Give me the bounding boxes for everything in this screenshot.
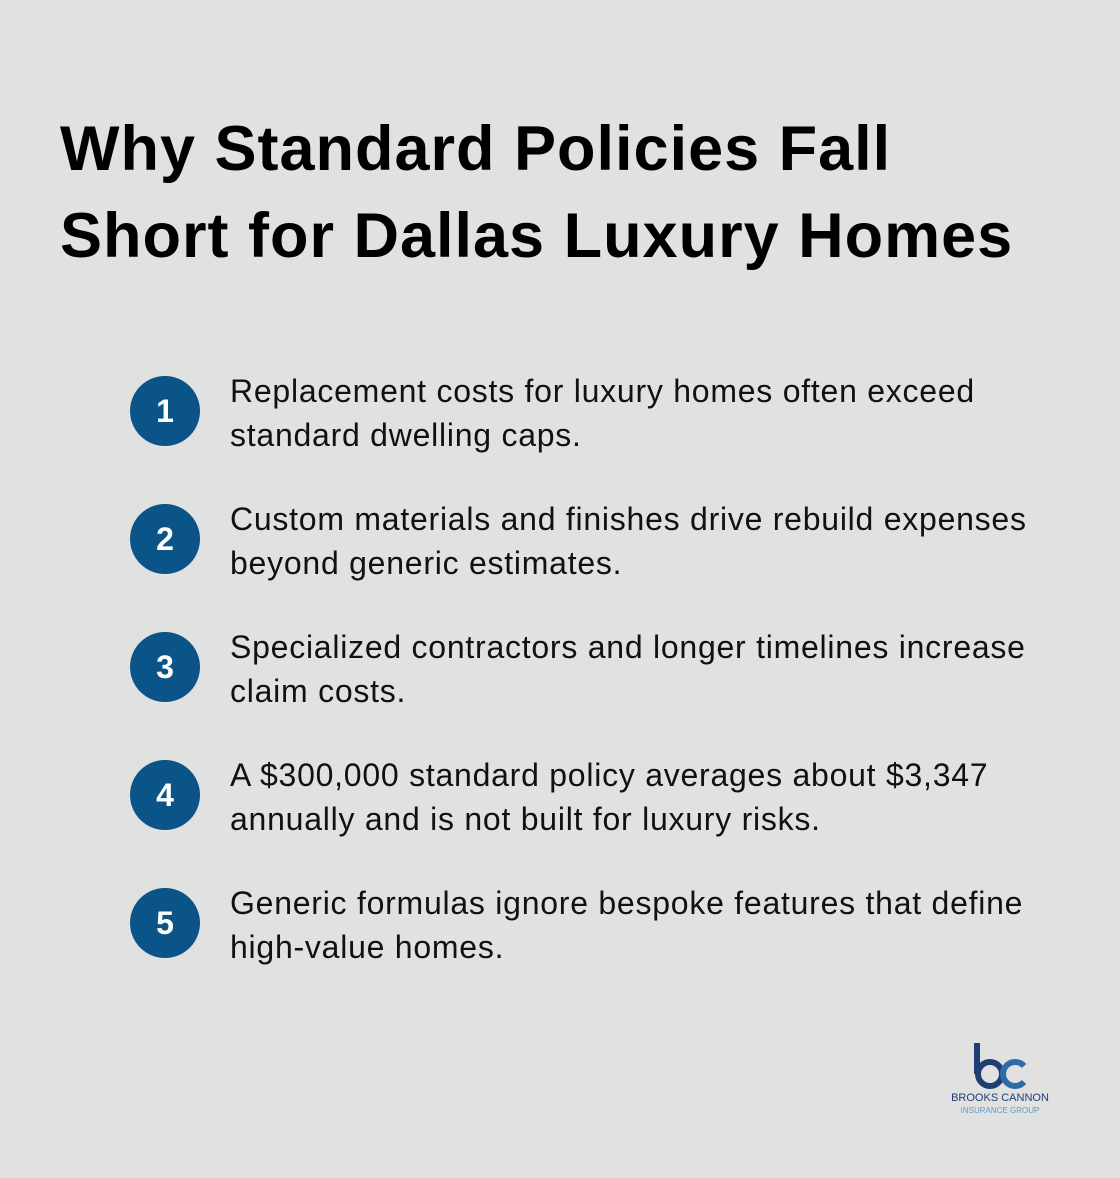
number badge 1 xyxy=(130,376,200,446)
text 1: standard dwelling caps. xyxy=(230,417,582,453)
item 4 xyxy=(130,757,988,837)
number badge 4 xyxy=(130,760,200,830)
title: Why Standard Policies Fall xyxy=(60,114,891,184)
text 1: Replacement costs for luxury homes often exceed xyxy=(230,373,975,409)
logo xyxy=(951,1043,1049,1115)
text 4: A $300,000 standard policy averages about $3,347 xyxy=(230,757,988,793)
number badge 5: 5 xyxy=(156,905,174,941)
number badge 5 xyxy=(130,888,200,958)
logo text xyxy=(951,1092,1049,1115)
number badge 2 xyxy=(130,504,200,574)
title: Short for Dallas Luxury Homes xyxy=(60,201,1013,271)
text 2: beyond generic estimates. xyxy=(230,545,622,581)
text 3 xyxy=(230,629,1026,709)
text 4: annually and is not built for luxury risks. xyxy=(230,801,821,837)
item 2 xyxy=(130,501,1027,581)
title xyxy=(60,114,1013,271)
number badge 2: 2 xyxy=(156,521,174,557)
text 2 xyxy=(230,501,1027,581)
logo text: BROOKS CANNON xyxy=(951,1092,1049,1104)
text 2: Custom materials and finishes drive rebuild expenses xyxy=(230,501,1027,537)
logo text: INSURANCE GROUP xyxy=(961,1106,1039,1115)
text 3: Specialized contractors and longer timelines increase xyxy=(230,629,1026,665)
logo mark bc xyxy=(974,1043,1026,1089)
item 5 xyxy=(130,885,1023,965)
text 1 xyxy=(230,373,975,453)
text 5 xyxy=(230,885,1023,965)
number badge 4: 4 xyxy=(156,777,174,813)
number badge 1: 1 xyxy=(156,393,174,429)
text 3: claim costs. xyxy=(230,673,406,709)
number badge 3 xyxy=(130,632,200,702)
text 5: Generic formulas ignore bespoke features that define xyxy=(230,885,1023,921)
text 4 xyxy=(230,757,988,837)
item 3 xyxy=(130,629,1026,709)
item 1 xyxy=(130,373,975,453)
text 5: high-value homes. xyxy=(230,929,504,965)
number badge 3: 3 xyxy=(156,649,174,685)
